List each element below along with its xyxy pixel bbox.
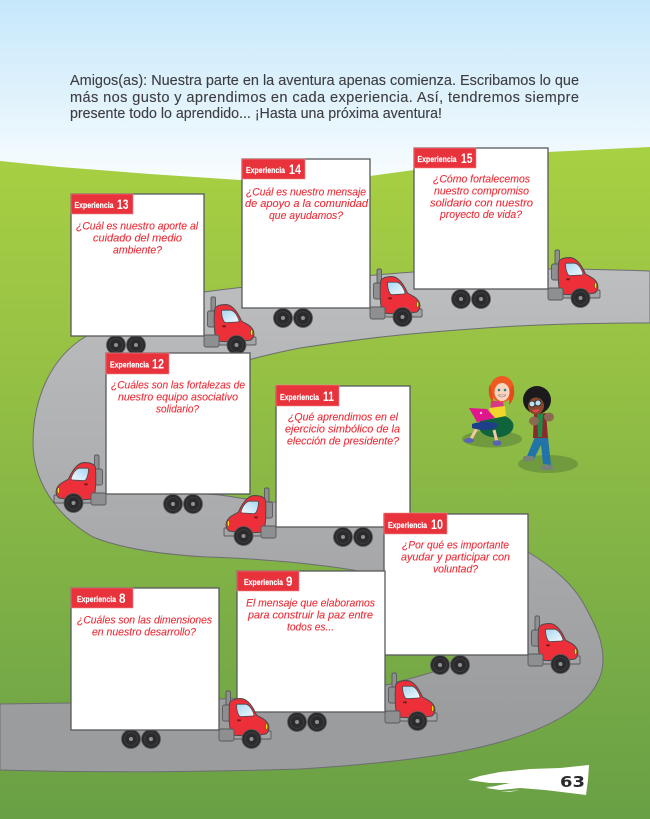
intro text (70, 73, 579, 122)
question 9: todos es... (287, 622, 334, 634)
question 15: ¿Cómo fortalecemos (433, 174, 531, 186)
question 13: ¿Cuál es nuestro aporte al (76, 220, 199, 232)
question 14: de apoyo a la comunidad (245, 198, 369, 210)
header: experiencia 8 (71, 588, 133, 608)
question 9 (246, 598, 376, 634)
header: experiencia 9: 9 (286, 574, 292, 589)
header: experiencia 12: 12 (152, 356, 164, 372)
truck: experiencia 9 (237, 571, 437, 732)
header: experiencia 12: Experiencia (110, 360, 149, 370)
truck: experiencia 8 (71, 588, 271, 748)
question 13: ambiente? (113, 244, 162, 256)
truck: experiencia 10 (384, 513, 580, 674)
illustration: boy with glasses (518, 386, 578, 473)
background sky (0, 0, 650, 190)
header: experiencia 14 (242, 159, 305, 179)
intro text: más nos gusto y aprendimos en cada experiencia. Así, tendremos siempre (70, 90, 579, 106)
page number brush (468, 765, 589, 795)
truck: experiencia 13 (71, 194, 256, 354)
question 11: elección de presidente? (287, 436, 399, 448)
header: experiencia 12 (106, 353, 169, 374)
intro text: presente todo lo aprendido... ¡Hasta una próxima aventura! (70, 106, 442, 122)
page number: 63 (560, 773, 585, 791)
header: experiencia 10 (384, 513, 447, 534)
question 14: que ayudamos? (269, 210, 343, 222)
header: experiencia 13 (71, 194, 133, 214)
question 9: El mensaje que elaboramos (246, 598, 376, 610)
question 8: ¿Cuáles son las dimensiones (77, 614, 213, 626)
truck: experiencia 15 (414, 148, 600, 308)
question 15 (430, 174, 533, 221)
header: experiencia 8: Experiencia (77, 594, 116, 604)
question 13: cuidado del medio (93, 232, 182, 244)
question 13 (76, 220, 199, 256)
question 10: ¿Por qué es importante (402, 540, 509, 552)
question 11 (285, 412, 400, 448)
question 8 (77, 614, 213, 638)
header: experiencia 15: Experiencia (418, 154, 457, 164)
question 8: en nuestro desarrollo? (92, 626, 196, 638)
winding road (0, 269, 650, 772)
header: experiencia 10: Experiencia (388, 520, 427, 530)
header: experiencia 14: Experiencia (246, 165, 285, 175)
question 15: proyecto de vida? (439, 209, 522, 221)
question 12 (111, 380, 245, 416)
header: experiencia 13: Experiencia (74, 200, 114, 210)
header: experiencia 14: 14 (289, 162, 301, 177)
question 10 (401, 540, 510, 576)
question 14 (245, 186, 369, 222)
question 9: para construir la paz entre (247, 610, 373, 622)
truck: experiencia 14 (242, 159, 422, 328)
illustration: girl with laptop (462, 376, 522, 448)
header: experiencia 11 (276, 385, 339, 406)
header: experiencia 9: Experiencia (244, 577, 283, 587)
intro text: Amigos(as): Nuestra parte en la aventura apenas comienza. Escribamos lo que (70, 73, 579, 89)
header: experiencia 10: 10 (431, 517, 443, 532)
question 15: solidario con nuestro (430, 198, 533, 210)
question 10: voluntad? (433, 564, 478, 576)
question 11: ejercicio simbólico de la (285, 424, 400, 436)
question 10: ayudar y participar con (401, 552, 510, 564)
question 12: solidario? (156, 404, 199, 416)
header: experiencia 11: 11 (323, 389, 334, 404)
header: experiencia 9 (237, 571, 299, 591)
truck: experiencia 12 (54, 353, 250, 514)
truck: experiencia 11 (224, 385, 410, 546)
header: experiencia 15: 15 (461, 151, 473, 166)
question 11: ¿Qué aprendimos en el (288, 412, 399, 424)
header: experiencia 11: Experiencia (280, 392, 319, 402)
header: experiencia 15 (414, 148, 476, 168)
question 12: ¿Cuáles son las fortalezas de (111, 380, 245, 392)
question 14: ¿Cuál es nuestro mensaje (246, 186, 366, 198)
question 15: nuestro compromiso (434, 186, 529, 198)
question 12: nuestro equipo asociativo (118, 392, 238, 404)
header: experiencia 13: 13 (117, 197, 129, 212)
header: experiencia 8: 8 (119, 591, 126, 606)
